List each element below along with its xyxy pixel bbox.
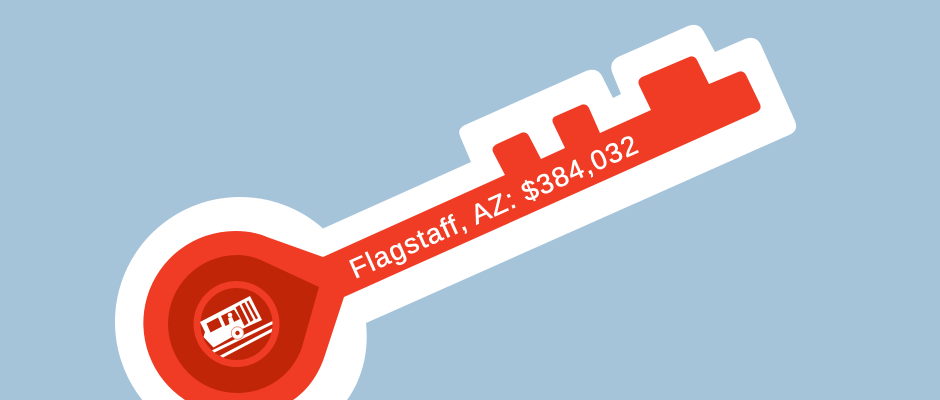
icon: cable car in ring (197, 284, 280, 364)
teardrop dark centre (168, 255, 319, 393)
key red body with teeth (143, 56, 761, 400)
infographic: key graphic on blue background (115, 24, 796, 400)
cable car body (200, 296, 262, 348)
cable car tracks (212, 321, 272, 358)
key label text: Flagstaff, AZ: $384,032 (345, 129, 642, 284)
key white outline (115, 25, 796, 400)
cable car wheel (231, 327, 244, 339)
cable car passenger (228, 313, 235, 326)
cable car windows (206, 300, 258, 332)
